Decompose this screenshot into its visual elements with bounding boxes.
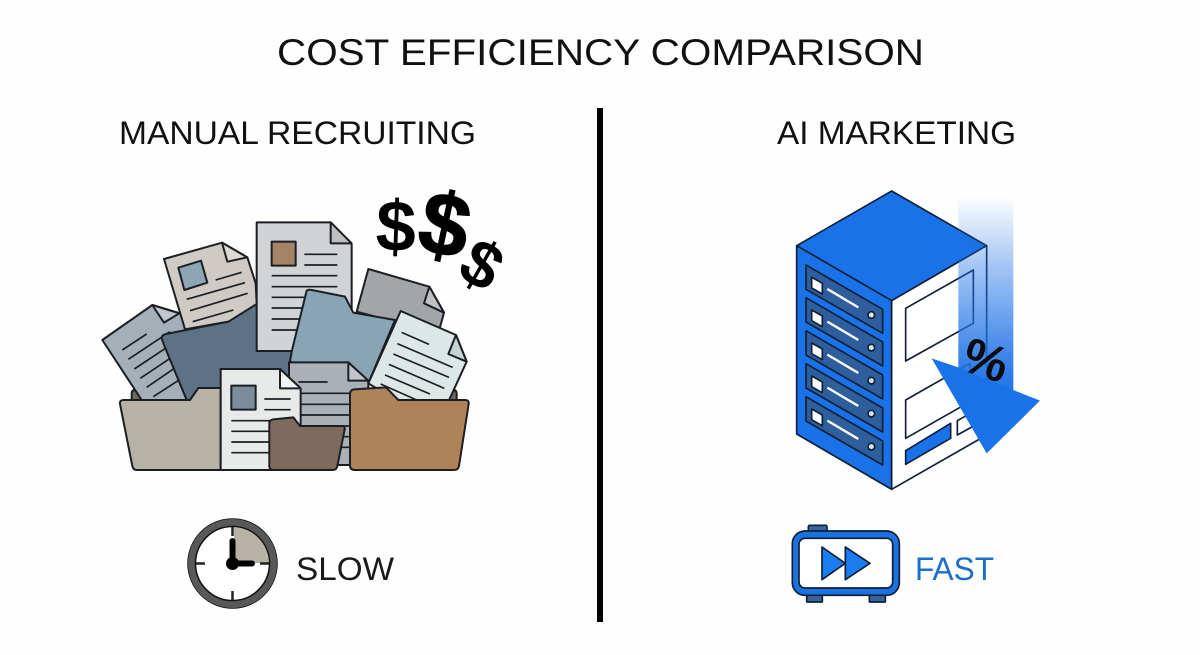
- server side window: [906, 270, 973, 361]
- icon: dollar signs: $: [448, 223, 516, 305]
- server right face: [892, 246, 987, 489]
- heading: manual recruiting: MANUAL RECRUITING: [119, 115, 476, 151]
- beige folder, front left: [120, 388, 221, 470]
- tall document, center: [257, 222, 352, 351]
- timer top button: [808, 525, 827, 532]
- grey document, back right: [357, 269, 444, 333]
- white document, front: [221, 369, 301, 470]
- server drive bay 4: [806, 364, 883, 432]
- title: COST EFFICIENCY COMPARISON: [277, 32, 924, 73]
- icon: dollar signs: $: [375, 186, 417, 268]
- server small vent: [957, 406, 983, 435]
- tilted beige document: [164, 243, 257, 329]
- timer body: [792, 531, 899, 595]
- fast-forward triangles: [822, 547, 870, 580]
- grey document, middle: [289, 362, 368, 465]
- icon: dollar signs: $: [411, 171, 479, 278]
- icon: server rack with falling cost arrow: [797, 191, 1040, 489]
- server side panel: [906, 363, 970, 438]
- icon: dollar signs: [375, 171, 516, 305]
- blue-grey folder: [290, 290, 395, 383]
- server drive bay 2: [806, 298, 883, 366]
- heading: AI marketing: AI MARKETING: [777, 115, 1016, 151]
- icon: slow clock: [188, 519, 277, 608]
- small brown folder: [269, 417, 345, 470]
- illustration: pile of documents and folders: [102, 222, 469, 470]
- arrow gradient shaft: [958, 197, 1013, 393]
- timer feet: [807, 595, 885, 602]
- timer screen: [799, 538, 893, 588]
- tilted document, left: [102, 305, 197, 400]
- label: fast: FAST: [915, 551, 994, 587]
- pale blue document, right: [368, 311, 467, 402]
- server drive bay 1: [806, 265, 883, 333]
- arrow head: [932, 358, 1040, 453]
- back folder rim: [132, 390, 457, 400]
- center divider: [597, 108, 603, 622]
- percent sign: %: [956, 327, 1016, 394]
- icon: fast-forward timer: [792, 525, 899, 602]
- server blue status bar: [906, 423, 951, 464]
- label: slow: SLOW: [296, 551, 395, 587]
- server drive bay 5: [806, 397, 883, 465]
- server drive bay 3: [806, 331, 883, 399]
- tan folder, front right: [350, 387, 469, 470]
- dark slate folder: [162, 303, 297, 400]
- server left face: [797, 246, 892, 489]
- server top face: [797, 191, 987, 301]
